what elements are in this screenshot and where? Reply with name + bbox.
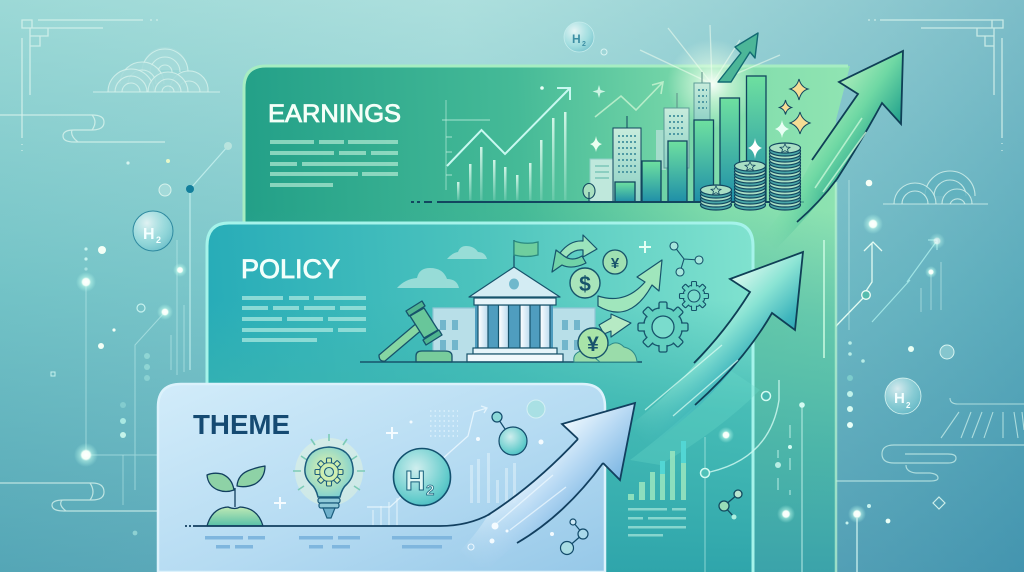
decoration: left circuit lines and dots (51, 142, 232, 535)
bubble: H2 left: H (143, 226, 155, 243)
icon: small gear (680, 282, 708, 310)
icon: yen coin small: ¥ (611, 255, 620, 272)
faint background chart (367, 406, 516, 526)
icon: bush (574, 343, 637, 362)
icon: tree (583, 184, 595, 202)
heading: theme: THEME (193, 409, 290, 440)
illustration: government building (433, 267, 595, 362)
icon: yen coin large (578, 328, 608, 358)
icon: plus (639, 241, 651, 253)
icon: dollar coin: $ (579, 273, 591, 296)
icon: H2 sphere: H (405, 465, 425, 496)
icon: flag (514, 240, 538, 267)
ground line (360, 361, 642, 363)
bubble: H2 right (885, 378, 921, 414)
decoration: cloud pattern right (883, 171, 988, 204)
burst of light (640, 25, 780, 129)
icon: clouds (397, 246, 487, 288)
icon: molecule and bubble (492, 400, 545, 455)
decoration: swirl left top (0, 115, 165, 142)
decoration: wave pattern (825, 445, 1024, 481)
bubble: H2 left (133, 211, 173, 251)
arrow: policy big arrow (638, 250, 804, 422)
icon: curved growth arrow (598, 260, 662, 312)
chart: faint rising line (595, 82, 663, 117)
icon: exchange arrows (552, 235, 597, 272)
arrow: theme big arrow (468, 402, 636, 547)
icon: sparkles (590, 79, 810, 159)
decoration: brush pattern (941, 398, 1024, 438)
text placeholder lines: theme (205, 536, 452, 548)
bubble: H2 left: 2 (156, 235, 161, 245)
decoration: top-left corner ornament (22, 20, 158, 151)
bubble: H2 right: H (894, 390, 905, 407)
heading: earnings: EARNINGS (268, 100, 401, 128)
icon: H2 sphere (394, 448, 450, 506)
text placeholder lines: earnings (270, 140, 398, 187)
icon: yen coin large: ¥ (587, 333, 599, 356)
illustration: city buildings (590, 72, 710, 202)
icon: gavel (379, 301, 452, 362)
icon: H2 sphere: 2 (426, 482, 434, 499)
icon: dollar coin (570, 268, 600, 298)
bubble: H2 right: 2 (906, 401, 911, 410)
lower circuit line (700, 380, 805, 572)
chart: glowing line chart (442, 85, 606, 200)
icon: molecule (670, 242, 703, 276)
chart: small rising arrow (718, 33, 758, 82)
bubble: H2 top: H (572, 32, 581, 46)
decoration: swirl left bottom (0, 483, 158, 511)
text placeholder lines: policy (242, 296, 366, 342)
icon: yen coin small (603, 250, 627, 274)
icon: big gear (638, 302, 688, 352)
icon: lightbulb (293, 434, 365, 518)
panel: earnings (244, 25, 850, 572)
icon: sprout (207, 466, 265, 526)
chart: green bars (615, 76, 766, 202)
heading: policy: POLICY (241, 254, 340, 284)
arrow: earnings big arrow (784, 50, 904, 238)
decoration: cloud pattern left (93, 47, 220, 92)
base line and sparkles (185, 420, 554, 550)
chart: lower mini bars (628, 441, 686, 536)
panel: theme (158, 384, 605, 572)
icon: small arrow (599, 314, 631, 337)
icon: small molecule (560, 519, 588, 554)
bubble: H2 top (564, 22, 607, 55)
decoration: top-right corner ornament (868, 20, 1003, 151)
panel: policy (158, 223, 805, 572)
decoration: right glowing lines and arrows (784, 180, 954, 572)
wedge behind policy arrow (630, 370, 760, 465)
chart baseline (411, 201, 804, 203)
bubble: H2 top: 2 (582, 41, 586, 48)
icon: coin stacks (700, 143, 800, 210)
icon: lower molecule (719, 490, 742, 520)
